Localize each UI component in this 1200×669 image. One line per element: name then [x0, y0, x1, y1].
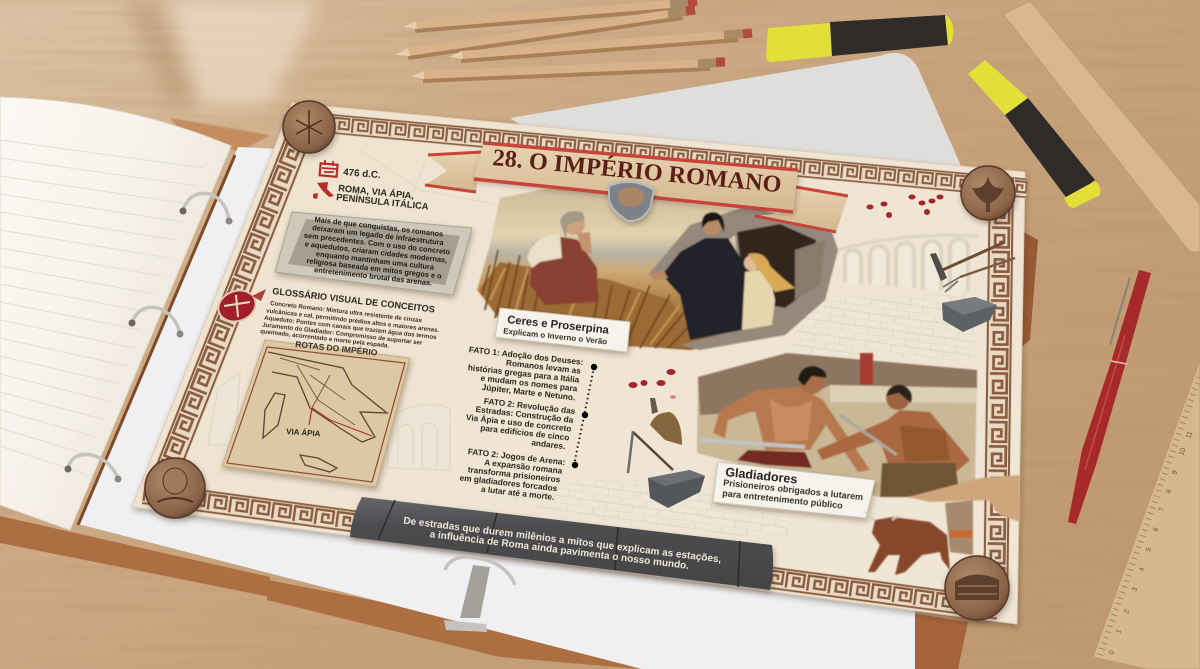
medallion bottom right colosseum	[945, 556, 1009, 620]
glossary text: queimado, acorrentado e morto pela espada.	[260, 328, 390, 350]
fatos text: A expansão romana	[484, 457, 563, 476]
fatos text: histórias gregas para a Itália	[467, 362, 580, 385]
wooden ruler bottom right	[1093, 360, 1200, 669]
stone text panel: e aquedutos, criaram cidades modernas,	[304, 239, 448, 265]
medallion top left	[283, 101, 335, 153]
map of Italy: VIA ÁPIA	[286, 427, 321, 438]
date text: 476 d.C.	[343, 167, 381, 181]
cobblestone road	[495, 292, 975, 540]
market stall	[945, 500, 973, 555]
illustration: Ceres and Proserpina	[477, 186, 838, 350]
caption: Gladiadores: para entretenimento público	[722, 488, 844, 511]
stone text panel: religiosa baseada em mitos gregos e o	[306, 256, 443, 281]
fatos text: FATO 2: Revolução das	[483, 396, 576, 416]
medallion bottom left	[145, 458, 205, 518]
helmet and hammer	[628, 398, 682, 473]
wooden ruler bottom right: 11	[1185, 430, 1194, 440]
map of Italy	[222, 340, 410, 487]
caption: Ceres e Proserpina	[495, 308, 630, 352]
wheat field	[479, 250, 705, 348]
ribbon tail right	[755, 186, 848, 232]
footer text: a influência de Roma ainda pavimenta o nosso mundo.	[429, 529, 690, 572]
wooden ruler bottom right: 9	[1171, 470, 1179, 476]
ribbon tail left	[425, 152, 482, 192]
wooden ruler bottom right: 2	[1123, 609, 1131, 615]
caption: Gladiadores: Gladiadores	[725, 465, 798, 487]
greek key border	[141, 110, 1028, 620]
footer text: De estradas que durem milênios a mitos que explicam as estações,	[403, 516, 722, 566]
binder ring top	[180, 193, 232, 224]
wooden ruler bottom right: 1	[1115, 629, 1123, 635]
timeline dots	[572, 364, 597, 468]
stone footer banner	[350, 497, 773, 590]
leather folder	[0, 118, 1038, 669]
wooden ruler bottom right: 8	[1165, 489, 1173, 495]
location text: ROMA, VIA ÁPIA,	[338, 183, 415, 201]
title ribbon	[474, 143, 798, 212]
fatos text: Romanos levam as	[506, 357, 582, 376]
shield	[609, 182, 654, 221]
caption: Gladiadores: Prisioneiros obrigados a lutarem	[723, 478, 864, 502]
wooden ruler bottom right: 5	[1145, 547, 1153, 553]
fatos text: andares.	[531, 437, 566, 451]
figure: Ceres	[527, 211, 598, 305]
fatos text: e mudam os nomes para	[480, 373, 578, 394]
rocks and cave	[648, 205, 838, 350]
fatos text: Estradas: Construção da	[475, 404, 574, 425]
faded colosseum sketch top right	[838, 235, 978, 291]
faint map lines	[360, 150, 500, 205]
beans top right	[866, 194, 944, 218]
red pen	[1068, 270, 1151, 524]
title: 28. O IMPÉRIO ROMANO	[491, 145, 783, 198]
glossary text	[260, 300, 440, 350]
binder ring bottom	[64, 455, 122, 482]
binder ring middle	[128, 307, 184, 338]
fatos text	[458, 344, 584, 503]
gladiator left	[700, 366, 870, 472]
pencils	[395, 1, 752, 79]
figure: Proserpina	[742, 253, 795, 330]
fatos text: Júpiter, Marte e Netuno.	[481, 382, 576, 402]
glossary text: vulcânicas e cal, permitindo prédios altos e maiores arenas.	[266, 308, 440, 334]
white back sheet	[510, 53, 965, 180]
icon: italy map	[313, 182, 334, 199]
icon: pomegranate	[214, 285, 266, 327]
wooden ruler bottom right: 6	[1152, 527, 1160, 533]
white notebook page	[78, 147, 915, 669]
stone text panel: Mais de que conquistas, os romanos	[314, 215, 444, 239]
fatos text: a lutar até a morte.	[480, 484, 555, 502]
fatos text: FATO 2: Jogos de Arena:	[467, 446, 566, 467]
caption: Gladiadores	[713, 462, 875, 518]
bottom binder clamp	[444, 557, 515, 632]
figure: Pluto	[650, 212, 745, 340]
beans middle	[628, 369, 676, 399]
glossary text: Concreto Romano: Mistura ultra resistente de cinzas	[270, 300, 423, 324]
fatos text: para edifícios de cinco	[480, 423, 570, 442]
illustration: gladiators	[697, 353, 977, 497]
left notebook page	[0, 97, 235, 530]
tools top right	[930, 242, 1015, 292]
stone text panel: sem precedentes. Com o uso do concreto	[303, 231, 451, 257]
wooden ruler bottom right: 0	[1108, 650, 1116, 656]
faded colosseum sketch left	[208, 372, 450, 470]
fatos text: FATO 1: Adoção dos Deuses:	[468, 344, 584, 367]
glossary heading: GLOSSÁRIO VISUAL DE CONCEITOS	[272, 285, 435, 314]
wooden ruler bottom right: 4	[1138, 567, 1146, 573]
fatos text: em gladiadores forcados	[459, 472, 558, 493]
caption: Ceres e Proserpina: Explicam o Inverno o Verão	[503, 327, 608, 346]
stone text panel	[275, 212, 472, 295]
infographic sheet	[132, 103, 1025, 624]
wooden ruler bottom right: 3	[1131, 587, 1139, 593]
stone text panel: enquanto mantinham uma cultura	[316, 249, 435, 272]
glossary text: Juramento do Gladiador: Compromisso de suportar ser	[262, 322, 423, 347]
glossary	[260, 285, 440, 350]
stone text panel: entretenimento brutal das arenas.	[314, 265, 433, 288]
location text: PENÍNSULA ITÁLICA	[336, 192, 429, 212]
market tent	[908, 475, 1020, 522]
yellow highlighter diagonal	[968, 60, 1100, 208]
concrete block top right	[942, 297, 997, 332]
glossary text: Aqueduto: Pontes com canais que traziam água dos termos	[264, 315, 437, 341]
stone text panel: deixaram um legado de infraestrutura	[312, 223, 445, 247]
map heading: ROTAS DO IMPÉRIO	[295, 339, 378, 358]
bull	[865, 512, 950, 575]
yellow highlighter horizontal	[766, 15, 953, 62]
medallion top right	[961, 166, 1015, 220]
wooden ruler top right	[1003, 1, 1200, 252]
gladiator right	[817, 385, 970, 497]
concrete block middle	[648, 470, 705, 508]
fatos text: transforma prisioneiros	[467, 464, 561, 485]
calendar icon	[320, 160, 338, 177]
location text	[336, 183, 429, 212]
fatos text: Via Ápia e uso de concreto	[466, 412, 572, 434]
wooden ruler bottom right: 10	[1178, 447, 1188, 457]
wooden ruler bottom right: 7	[1158, 507, 1166, 513]
caption: Ceres e Proserpina: Ceres e Proserpina	[507, 314, 610, 337]
